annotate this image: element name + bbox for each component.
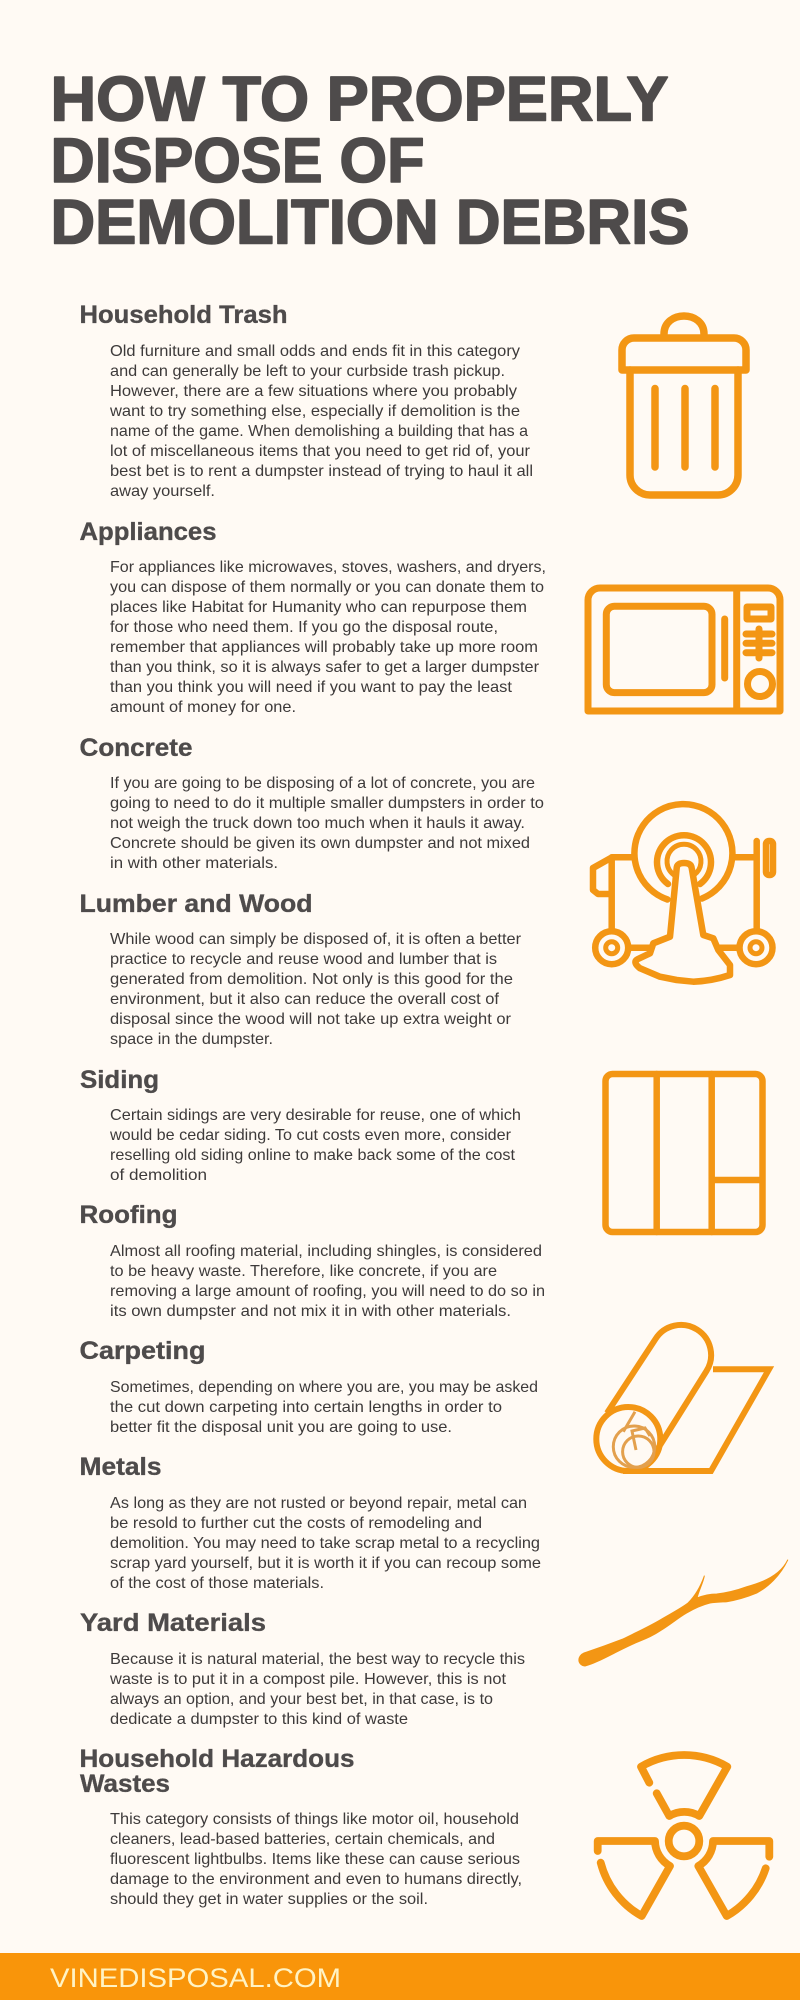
text block: appliances [110, 559, 546, 716]
heading: lumber and wood: Lumber and Wood [80, 890, 312, 918]
text block: siding: of demolition [110, 1167, 207, 1184]
icon: radiation symbol [598, 1755, 769, 1916]
text block: metals [110, 1495, 541, 1592]
title: DISPOSE OF [50, 126, 424, 196]
text block: concrete: Concrete should be given its own dumpster and not mixed [110, 835, 530, 852]
text block: household hazardous wastes: cleaners, lead-based batteries, certain chemicals, and [110, 1831, 495, 1848]
text block: household trash: best bet is to rent a dumpster instead of trying to haul it all [110, 463, 533, 480]
text block: siding [109, 1107, 521, 1184]
heading: siding: Siding [80, 1066, 159, 1094]
icon: microwave [588, 588, 780, 711]
icon: branch [579, 1560, 788, 1666]
text block: concrete: in with other materials. [110, 855, 278, 872]
title [50, 64, 690, 258]
panel: appliances [80, 518, 546, 716]
panel: yard materials [80, 1609, 525, 1728]
text block: roofing: removing a large amount of roofing, you will need to do so in [110, 1283, 545, 1300]
text block: roofing: Almost all roofing material, including shingles, is considered [110, 1243, 542, 1260]
text block: carpeting: better fit the disposal unit you are going to use. [110, 1419, 452, 1436]
text block: concrete: If you are going to be disposing of a lot of concrete, you are [110, 775, 535, 792]
text block: lumber and wood: disposal since the wood will not take up extra weight or [110, 1011, 512, 1028]
footer band [0, 1953, 800, 2000]
text block: household trash: lot of miscellaneous items that you need to get rid of, your [110, 443, 531, 460]
text block: household hazardous wastes: This category consists of things like motor oil, household [110, 1811, 519, 1828]
text block: metals: As long as they are not rusted or beyond repair, metal can [110, 1495, 527, 1512]
text block: yard materials: dedicate a dumpster to this kind of waste [110, 1711, 408, 1728]
text block: household hazardous wastes: fluorescent lightbulbs. Items like these can cause serious [110, 1851, 520, 1868]
text block: yard materials: Because it is natural material, the best way to recycle this [110, 1651, 525, 1668]
text block: metals: of the cost of those materials. [110, 1575, 324, 1592]
text block: lumber and wood: environment, but it also can reduce the overall cost of [110, 991, 500, 1008]
text block: yard materials: always an option, and your best bet, in that case, is to [110, 1691, 493, 1708]
text block: household trash [109, 343, 533, 500]
text block: appliances: remember that appliances will probably take up more room [110, 639, 538, 656]
text block: concrete: not weigh the truck down too much when it hauls it away. [110, 815, 525, 832]
title: HOW TO PROPERLY [50, 64, 668, 134]
text block: household hazardous wastes: damage to the environment and even to humans directly, [110, 1871, 522, 1888]
text block: appliances: places like Habitat for Humanity who can repurpose them [110, 599, 527, 616]
text block: appliances: amount of money for one. [110, 699, 296, 716]
text block: appliances: than you think, so it is always safer to get a larger dumpster [110, 659, 540, 676]
text block: carpeting: Sometimes, depending on where you are, you may be asked [110, 1379, 538, 1396]
text block: roofing [110, 1243, 545, 1320]
heading: yard materials: Yard Materials [80, 1609, 266, 1637]
heading: household trash: Household Trash [80, 301, 288, 329]
panel: household trash [80, 301, 533, 500]
text block: metals: scrap yard yourself, but it is worth it if you can recoup some [110, 1555, 541, 1572]
text block: siding: would be cedar siding. To cut costs even more, consider [109, 1127, 512, 1144]
icon: concrete mixer [593, 804, 773, 982]
text block: household hazardous wastes [110, 1811, 522, 1908]
icon: siding panels [606, 1074, 762, 1232]
text block: lumber and wood [110, 931, 522, 1048]
heading: roofing: Roofing [80, 1201, 178, 1229]
text block: carpeting: the cut down carpeting into certain lengths in order to [110, 1399, 502, 1416]
panel: household hazardous wastes [80, 1745, 522, 1908]
text block: roofing: its own dumpster and not mix it in with other materials. [110, 1303, 511, 1320]
text block: household trash: name of the game. When demolishing a building that has a [110, 423, 528, 440]
text block: appliances: you can dispose of them normally or you can donate them to [110, 579, 544, 596]
text block: siding: Certain sidings are very desirable for reuse, one of which [110, 1107, 521, 1124]
text block: household trash: Old furniture and small odds and ends fit in this category [110, 343, 520, 360]
text block: appliances: for those who need them. If you go the disposal route, [110, 619, 498, 636]
text block: lumber and wood: practice to recycle and reuse wood and lumber that is [110, 951, 497, 968]
icon: trash can [622, 316, 746, 495]
panel: siding [80, 1066, 521, 1184]
text block: household trash: and can generally be left to your curbside trash pickup. [110, 363, 505, 380]
text block: lumber and wood: space in the dumpster. [110, 1031, 273, 1048]
panel: carpeting [80, 1337, 538, 1436]
heading: household hazardous wastes [80, 1745, 354, 1798]
text block: appliances: than you think you will need if you want to pay the least [110, 679, 513, 696]
text block: metals: be resold to further cut the costs of remodeling and [110, 1515, 482, 1532]
panel: concrete [80, 734, 544, 872]
text block: yard materials [109, 1651, 525, 1728]
panel: metals [80, 1453, 541, 1592]
heading: appliances: Appliances [80, 518, 216, 546]
text block: household trash: However, there are a few situations where you probably [110, 383, 517, 400]
text block: household trash: away yourself. [110, 483, 215, 500]
heading: metals: Metals [80, 1453, 162, 1481]
title: DEMOLITION DEBRIS [50, 188, 690, 258]
footer text: website: VINEDISPOSAL.COM [50, 1963, 341, 1993]
text block: concrete [110, 775, 544, 872]
text block: appliances: For appliances like microwaves, stoves, washers, and dryers, [110, 559, 546, 576]
text block: metals: demolition. You may need to take scrap metal to a recycling [110, 1535, 540, 1552]
text block: roofing: to be heavy waste. Therefore, like concrete, if you are [110, 1263, 497, 1280]
panel: roofing [80, 1201, 545, 1320]
heading: carpeting: Carpeting [80, 1337, 206, 1365]
text block: concrete: going to need to do it multiple smaller dumpsters in order to [110, 795, 544, 812]
icon: carpet roll [596, 1325, 769, 1471]
heading: household hazardous wastes: Wastes [80, 1770, 170, 1798]
text block: household trash: want to try something else, especially if demolition is the [109, 403, 520, 420]
text block: carpeting [110, 1379, 538, 1436]
panel: lumber and wood [80, 890, 522, 1048]
heading: household hazardous wastes: Household Hazardous [80, 1745, 354, 1773]
text block: yard materials: waste is to put it in a compost pile. However, this is not [109, 1671, 507, 1688]
text block: household hazardous wastes: should they get in water supplies or the soil. [110, 1891, 428, 1908]
text block: lumber and wood: While wood can simply be disposed of, it is often a better [110, 931, 522, 948]
heading: concrete: Concrete [80, 734, 193, 762]
text block: siding: reselling old siding online to make back some of the cost [110, 1147, 516, 1164]
text block: lumber and wood: generated from demolition. Not only is this good for the [110, 971, 513, 988]
